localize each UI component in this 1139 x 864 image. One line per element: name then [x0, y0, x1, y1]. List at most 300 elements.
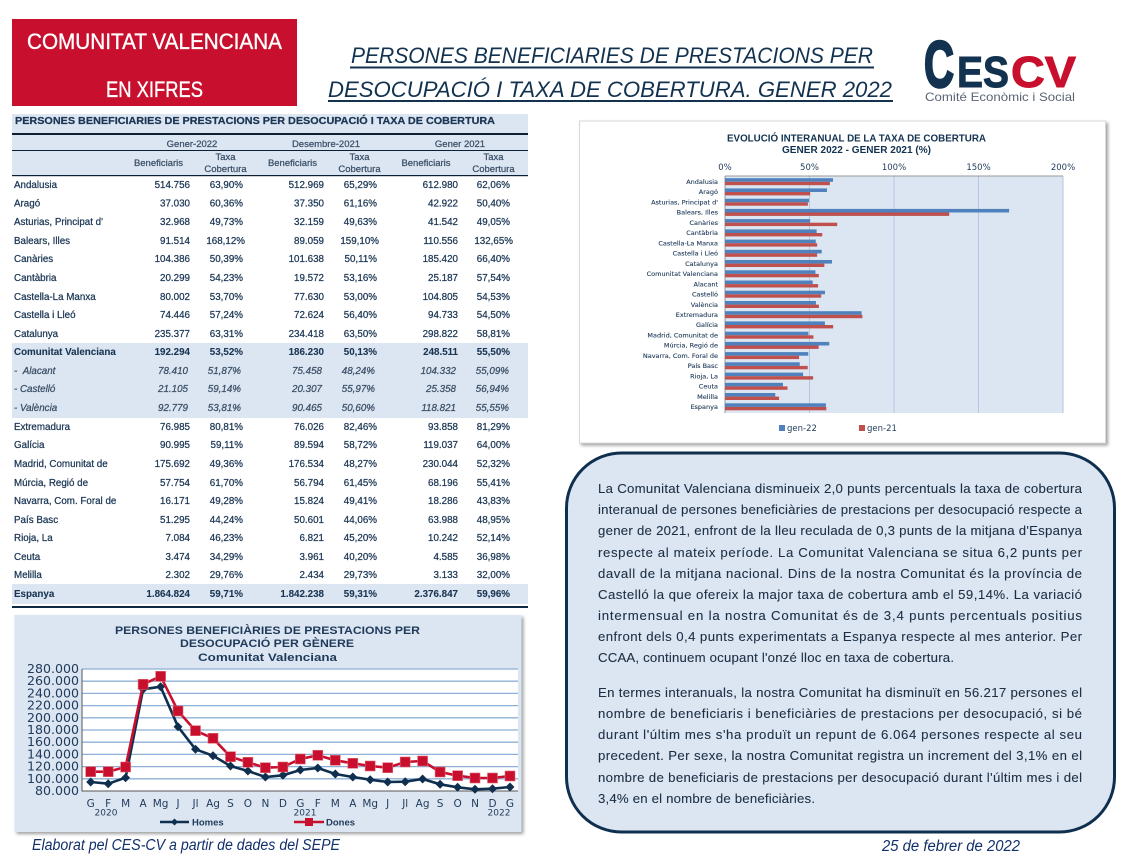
bar chart title: EVOLUCIÓ INTERANUAL DE LA TAXA DE COBERTURA — [727, 132, 986, 144]
row: Madrid: 49,36% — [210, 459, 243, 470]
bars: Andalusia — [686, 178, 833, 186]
main title: DESOCUPACIÓ I TAXA DE COBERTURA. GENER 2022 — [328, 77, 892, 102]
row: Castella i Lleó: 57,24% — [210, 310, 243, 321]
row: Rioja: 7.084 — [165, 533, 191, 544]
table header: Cobertura — [204, 164, 247, 175]
bars: Navarra: Navarra, Com. Foral de — [643, 352, 718, 360]
bars: Madrid — [647, 332, 813, 340]
row: Castella i Lleó — [14, 310, 510, 321]
paragraph 2: precedent. Per sexe, la nostra Comunitat registra un increment del 3,1% en el — [598, 748, 1082, 763]
row: Castelló — [14, 384, 509, 395]
logo: CES-CV: ES — [957, 48, 1009, 97]
row: València: 118.821 — [421, 403, 456, 414]
row: Rioja: Rioja, La — [14, 533, 53, 544]
bar chart axis labels — [718, 163, 1075, 173]
bars: Andalusia: Andalusia — [686, 178, 718, 186]
row: Galícia: 90.995 — [160, 440, 191, 451]
banner: Comunitat Valenciana en xifres — [12, 19, 297, 106]
row: Canàries: 185.420 — [423, 254, 459, 265]
row: Ceuta: 3.474 — [165, 552, 191, 563]
row: Canàries — [14, 254, 510, 265]
bars: Aragó — [699, 188, 827, 196]
x axis labels: G — [296, 798, 304, 810]
row: Galícia — [14, 440, 510, 451]
bars: Castella-La Manxa — [658, 239, 817, 247]
row: Galícia: Galícia — [14, 440, 45, 451]
row: Comunitat Valenciana: 53,52% — [210, 347, 243, 358]
row: Extremadura: 82,46% — [344, 422, 377, 433]
row: Cantàbria — [14, 273, 510, 284]
bar chart title — [727, 132, 986, 156]
row: Comunitat Valenciana: 186.230 — [289, 347, 325, 358]
row: Espanya: 1.864.824 — [146, 589, 191, 600]
bars: València: València — [691, 301, 718, 309]
row: Canàries: 50,39% — [210, 254, 243, 265]
row: Andalusia: 514.756 — [155, 180, 191, 191]
row: Cantàbria: 57,54% — [477, 273, 510, 284]
row: Melilla: 32,00% — [477, 570, 510, 581]
paragraph 1: respecte al mateix període. La Comunitat Valenciana se situa 6,2 punts per — [598, 545, 1083, 560]
x axis labels: J — [175, 798, 180, 810]
row: Balears: 89.059 — [294, 236, 324, 247]
row: Asturias: 32.159 — [294, 217, 324, 228]
row: Andalusia: Andalusia — [14, 180, 58, 191]
x axis labels: N — [261, 798, 269, 810]
row: Andalusia — [14, 180, 510, 191]
row: País Basc: 44,24% — [210, 515, 243, 526]
x axis labels: Ag — [416, 798, 430, 810]
legend: Homes and Dones — [160, 818, 355, 828]
paragraph 1: davall de la mitjana nacional. Dins de la nostra Comunitat és la província de — [598, 566, 1082, 581]
bar chart axis labels: 200% — [1051, 163, 1075, 173]
row: Ceuta: Ceuta — [14, 552, 41, 563]
row: Castelló: 21.105 — [157, 384, 189, 395]
paragraph 1 — [598, 481, 1083, 665]
y axis labels: 280.000 — [27, 661, 79, 676]
bar chart axis labels: 150% — [966, 163, 991, 173]
row: Espanya: Espanya — [14, 589, 55, 600]
x axis labels: F — [315, 798, 321, 810]
line chart title — [115, 624, 420, 664]
bar chart legend — [779, 424, 897, 434]
bars: Canàries: Canàries — [690, 219, 719, 227]
row: Rioja: 46,23% — [210, 533, 243, 544]
bars: Aragó: Aragó — [699, 188, 718, 196]
table header: Taxa — [215, 152, 236, 163]
row: Rioja: 45,20% — [344, 533, 377, 544]
row: Catalunya: 234.418 — [289, 329, 325, 340]
bars: Galícia: Galícia — [696, 321, 718, 329]
row: Asturias: 32.968 — [160, 217, 191, 228]
row: Castella-La Manxa: 54,53% — [477, 292, 510, 303]
row: Melilla: 2.302 — [165, 570, 190, 581]
row: Madrid: 230.044 — [423, 459, 459, 470]
row: Madrid: 175.692 — [155, 459, 190, 470]
row: Navarra: 16.171 — [160, 496, 190, 507]
row: Ceuta: 4.585 — [433, 552, 459, 563]
row: Aragó: 37.030 — [160, 198, 191, 210]
bars: Balears: Balears, Illes — [677, 209, 719, 217]
bars: Rioja: Rioja, La — [690, 372, 718, 380]
row: Castella-La Manxa: 80.002 — [160, 292, 190, 303]
row: Balears: 91.514 — [160, 236, 191, 247]
row: Castelló: 55,97% — [342, 384, 375, 395]
row: València: 55,55% — [476, 403, 509, 414]
row: Melilla: 29,76% — [210, 570, 243, 581]
x axis labels: G — [506, 798, 514, 810]
row: Castella-La Manxa — [14, 292, 510, 303]
y axis labels: 160.000 — [27, 734, 79, 749]
row: Catalunya: 58,81% — [477, 329, 510, 340]
table header: Beneficiaris — [134, 158, 183, 169]
paragraph 2 — [598, 685, 1082, 806]
row: Canàries: 104.386 — [155, 254, 191, 265]
row: País Basc: País Basc — [14, 515, 58, 526]
row: Comunitat Valenciana: 248.511 — [423, 347, 459, 358]
y axis labels: 260.000 — [27, 673, 79, 688]
row: Cantàbria: 19.572 — [294, 273, 324, 284]
y axis labels: 180.000 — [27, 722, 79, 737]
row: Castelló: 56,94% — [476, 384, 509, 395]
table header — [12, 133, 528, 176]
row: Balears: 168,12% — [206, 236, 245, 247]
x axis labels: F — [105, 798, 111, 810]
row: Madrid: Madrid, Comunitat de — [14, 459, 108, 470]
row: Ceuta: 36,98% — [477, 552, 510, 563]
row: Asturias: 49,73% — [210, 217, 243, 228]
row: Castella-La Manxa: 104.805 — [423, 292, 459, 303]
row: Múrcia: 56.794 — [294, 478, 325, 489]
bars: Extremadura — [676, 311, 862, 319]
paragraph 1: La Comunitat Valenciana disminueix 2,0 punts percentuals la taxa de cobertura — [598, 481, 1083, 496]
row: Aragó: 50,40% — [477, 198, 510, 210]
bars: Madrid: Madrid, Comunitat de — [647, 332, 718, 340]
paragraph 2: 3,4% en el nombre de beneficiàries. — [598, 791, 815, 806]
x axis labels: Mg — [153, 798, 168, 810]
bars: València — [691, 301, 819, 309]
bar chart axis labels: 100% — [882, 163, 906, 173]
series: Dones — [91, 676, 510, 778]
row: Andalusia: 65,29% — [344, 180, 377, 191]
row: Navarra — [14, 496, 510, 507]
row: Castella-La Manxa: 77.630 — [294, 292, 325, 303]
y axis labels: 140.000 — [27, 746, 79, 761]
x axis labels: S — [227, 798, 234, 810]
y axis labels: 200.000 — [27, 710, 79, 725]
paragraph 2: nombre de beneficiaris de prestacions per desocupació durant l'últim mes i del — [598, 770, 1082, 785]
row: Múrcia: 55,41% — [477, 478, 510, 489]
x axis labels: N — [471, 798, 479, 810]
row: Alacant: 78.410 — [158, 366, 189, 377]
table header: Gener 2021 — [435, 139, 485, 150]
bars: Cantàbria: Cantàbria — [686, 229, 718, 237]
row: Balears: 132,65% — [474, 236, 513, 247]
bars: Espanya — [690, 403, 826, 411]
row: Espanya — [14, 589, 510, 600]
row: Madrid: 176.534 — [289, 459, 325, 470]
row: Cantàbria: 25.187 — [428, 273, 458, 284]
panel: commentary text — [566, 453, 1114, 832]
row: Canàries: 50,11% — [344, 254, 377, 265]
x axis labels: G — [87, 798, 95, 810]
row: Cantàbria: Cantàbria — [14, 273, 57, 284]
bars: Canàries — [690, 219, 837, 227]
row: Andalusia: 512.969 — [289, 180, 324, 191]
panel: bar chart of coverage rate — [580, 121, 1106, 443]
row: Catalunya: 63,31% — [210, 329, 243, 340]
y axis labels — [27, 661, 79, 798]
x axis labels: A — [349, 798, 357, 810]
bars: País Basc: País Basc — [688, 362, 718, 370]
row: Melilla: 3.133 — [433, 570, 459, 581]
x axis labels: 2021 — [294, 808, 316, 818]
row: Galícia: 89.594 — [294, 440, 325, 451]
paragraph 1: gener de 2021, enfront de la lleu reculada de 0,3 punts de la mitjana d'Espanya — [598, 523, 1083, 538]
row: País Basc: 48,95% — [477, 515, 510, 526]
bar chart legend: gen-21 — [867, 424, 897, 434]
row: Navarra: 49,28% — [210, 496, 243, 507]
row: Castelló: 20.307 — [291, 384, 323, 395]
row: València: 50,60% — [342, 403, 375, 414]
row: Alacant: 75.458 — [292, 366, 323, 377]
bars: Castelló: Castelló — [692, 290, 718, 298]
x axis labels: 2022 — [488, 808, 510, 818]
bars: Navarra — [643, 352, 808, 360]
x axis labels: O — [244, 798, 252, 810]
row: Castella i Lleó: 54,50% — [477, 310, 510, 321]
table header: Desembre-2021 — [292, 139, 360, 150]
row: València: - València — [14, 403, 58, 414]
row: Extremadura: 81,29% — [477, 422, 510, 433]
row: Múrcia: 68.196 — [428, 478, 459, 489]
row: Aragó: 61,16% — [344, 198, 377, 210]
row: Cantàbria: 20.299 — [160, 273, 190, 284]
row: Alacant: 104.332 — [421, 366, 457, 377]
date: 25 de febrer de 2022 — [881, 838, 1020, 855]
row: Andalusia: 62,06% — [477, 180, 510, 191]
legend: Homes and Dones: Homes — [192, 818, 224, 828]
row: Catalunya: Catalunya — [14, 329, 59, 340]
row: Castella i Lleó: 72.624 — [294, 310, 325, 321]
bars: Comunitat Valenciana — [647, 270, 819, 278]
source note: Elaborat pel CES-CV a partir de dades del SEPE — [32, 837, 341, 854]
row: Navarra: Navarra, Com. Foral de — [14, 496, 117, 507]
bars: Balears — [677, 209, 1009, 217]
row: Navarra: 18.286 — [428, 496, 459, 507]
bars: Catalunya: Catalunya — [685, 260, 718, 268]
paragraph 1: CCAA, continuem ocupant l'onzé lloc en taxa de cobertura. — [598, 650, 954, 665]
row: Navarra: 49,41% — [344, 496, 377, 507]
x axis labels: O — [453, 798, 462, 810]
bars: Asturias: Asturias, Principat d' — [651, 198, 718, 206]
bars: Comunitat Valenciana: Comunitat Valenciana — [647, 270, 718, 278]
paragraph 1: enfront dels 0,4 punts experimentats a Espanya respecte al mes anterior. Per — [598, 629, 1083, 644]
paragraph 2: durant l'últim mes s'ha produït un repunt de 6.064 persones respecte al seu — [598, 727, 1082, 742]
bars: Castella i Lleó: Castella i Lleó — [673, 250, 718, 258]
row: Catalunya: 63,50% — [344, 329, 377, 340]
row: Aragó: 37.350 — [294, 198, 325, 210]
row: Asturias — [14, 217, 510, 228]
row: Melilla: 2.434 — [299, 570, 325, 581]
series: Homes — [91, 687, 510, 789]
logo: CES-CV — [924, 27, 1077, 104]
row: País Basc — [14, 515, 510, 526]
row: Galícia: 58,72% — [344, 440, 377, 451]
row: Múrcia: 61,70% — [210, 478, 243, 489]
row: Extremadura: 76.026 — [294, 422, 325, 433]
bars: Alacant: Alacant — [694, 280, 718, 288]
y axis labels: 240.000 — [27, 685, 79, 700]
bars: Castella i Lleó — [673, 250, 822, 258]
row: Castella-La Manxa: Castella-La Manxa — [14, 292, 96, 303]
row: Andalusia: 612.980 — [423, 180, 459, 191]
banner: Comunitat Valenciana en xifres: EN XIFRES — [106, 77, 203, 102]
row: Madrid: 48,27% — [344, 459, 377, 470]
paragraph 1: interanual de persones beneficiàries de prestacions per desocupació respecte a — [598, 502, 1083, 517]
row: Navarra: 43,83% — [477, 496, 510, 507]
row: Rioja: 10.242 — [428, 533, 458, 544]
bars: Melilla — [697, 393, 779, 401]
main title — [328, 43, 893, 102]
row: Catalunya: 298.822 — [423, 329, 458, 340]
row: Aragó: 42.922 — [428, 198, 458, 210]
x axis labels: Ag — [206, 798, 220, 810]
row: València: 53,81% — [208, 403, 241, 414]
x axis labels: D — [279, 798, 287, 810]
x axis labels: D — [488, 798, 497, 810]
bar chart legend: gen-22 — [787, 424, 817, 434]
row: Melilla — [14, 570, 510, 581]
bar chart axis labels: 50% — [800, 163, 819, 173]
row: Balears: Balears, Illes — [14, 236, 70, 247]
bars: Castelló — [692, 290, 825, 298]
row: Comunitat Valenciana: 192.294 — [155, 347, 191, 358]
row: Rioja: 6.821 — [299, 533, 324, 544]
row: País Basc: 44,06% — [344, 515, 377, 526]
line chart title: DESOCUPACIÓ PER GÈNERE — [180, 637, 354, 650]
row: Asturias: Asturias, Principat d' — [14, 217, 103, 228]
row: Balears — [14, 236, 513, 247]
row: Alacant — [14, 366, 509, 377]
row: Catalunya — [14, 329, 510, 340]
row: Castella i Lleó: 56,40% — [344, 310, 377, 321]
table title — [12, 114, 528, 133]
row: País Basc: 50.601 — [294, 515, 324, 526]
row: Asturias: 49,63% — [344, 217, 377, 228]
table header: Taxa — [483, 152, 504, 163]
row: Melilla: 29,73% — [344, 570, 377, 581]
bars: Castella-La Manxa: Castella-La Manxa — [658, 239, 718, 247]
row: Galícia: 119.037 — [423, 440, 458, 451]
row: Ceuta: 3.961 — [299, 552, 324, 563]
paragraph 2: En termes interanuals, la nostra Comunitat ha disminuït en 56.217 persones el — [598, 685, 1082, 700]
row: Canàries: Canàries — [14, 254, 53, 265]
bar chart axis labels: 0% — [718, 163, 732, 173]
panel: line chart by gender — [14, 615, 522, 832]
bars: País Basc — [688, 362, 808, 370]
table title: PERSONES BENEFICIARIES DE PRESTACIONS PER DESOCUPACIÓ I TAXA DE COBERTURA — [15, 114, 495, 127]
row: Extremadura — [14, 422, 510, 433]
bars: Espanya: Espanya — [690, 403, 718, 411]
row: Múrcia — [14, 478, 510, 489]
x axis labels: J — [385, 798, 389, 810]
table header: Cobertura — [338, 164, 381, 175]
row: València: 92.779 — [158, 403, 189, 414]
row: Rioja: 52,14% — [477, 533, 510, 544]
banner: Comunitat Valenciana en xifres: COMUNITAT VALENCIANA — [27, 29, 282, 54]
highlight bands — [12, 343, 528, 608]
row: Aragó: 60,36% — [210, 198, 243, 210]
row: Alacant: - Alacant — [14, 366, 57, 377]
x axis labels: Jl — [191, 798, 199, 810]
bars: Alacant — [694, 280, 818, 288]
x axis labels: M — [331, 798, 340, 810]
row: Asturias: 49,05% — [477, 217, 510, 228]
row: Alacant: 55,09% — [476, 366, 509, 377]
paragraph 1: intermensual en la nostra Comunitat és de 3,4 punts percentuals positius — [598, 608, 1082, 623]
row: Múrcia: Múrcia, Regió de — [14, 478, 89, 489]
panel: data table — [12, 114, 528, 608]
row: Comunitat Valenciana — [14, 347, 510, 358]
row: Navarra: 15.824 — [294, 496, 325, 507]
bars: Melilla: Melilla — [697, 393, 718, 401]
table header: Gener-2022 — [167, 139, 217, 150]
row: Alacant: 51,87% — [208, 366, 241, 377]
row: Castella i Lleó: Castella i Lleó — [14, 310, 76, 321]
row: Extremadura: 76.985 — [160, 422, 191, 433]
table header: Beneficiaris — [268, 158, 317, 169]
bar chart title: GENER 2022 - GENER 2021 (%) — [782, 145, 931, 156]
bars: Catalunya — [685, 260, 832, 268]
bars: Galícia — [696, 321, 833, 329]
bars: Múrcia: Múrcia, Regió de — [664, 342, 718, 350]
row: Aragó — [14, 198, 510, 210]
row: València: 90.465 — [292, 403, 323, 414]
legend: Homes and Dones: Dones — [326, 818, 355, 828]
x axis labels: 2020 — [95, 808, 118, 818]
row: Extremadura: Extremadura — [14, 422, 71, 433]
row: Catalunya: 235.377 — [155, 329, 190, 340]
logo: CES-CV: Comité Econòmic i Social — [925, 90, 1075, 104]
row: Comunitat Valenciana: 50,13% — [344, 347, 377, 358]
row: Madrid: 52,32% — [477, 459, 510, 470]
y axis labels: 220.000 — [27, 698, 79, 713]
bars: Rioja — [690, 372, 813, 380]
x axis labels: M — [121, 798, 130, 810]
row: Extremadura: 93.858 — [428, 422, 459, 433]
row: País Basc: 51.295 — [160, 515, 191, 526]
bars: Asturias — [651, 198, 809, 206]
bars: Cantàbria — [686, 229, 822, 237]
row: Alacant: 48,24% — [342, 366, 375, 377]
row: Castella i Lleó: 94.733 — [428, 310, 459, 321]
row: Galícia: 59,11% — [210, 440, 243, 451]
row: Balears: 110.556 — [423, 236, 459, 247]
line chart title: Comunitat Valenciana — [198, 652, 338, 664]
row: Castelló: 59,14% — [208, 384, 241, 395]
bars: Múrcia — [664, 342, 829, 350]
row: Comunitat Valenciana: 55,50% — [477, 347, 510, 358]
row: Castelló: - Castelló — [14, 384, 56, 395]
x axis labels: S — [437, 798, 444, 810]
y axis labels: 100.000 — [27, 771, 79, 786]
x axis labels: Mg — [362, 798, 378, 810]
row: Ceuta — [14, 552, 510, 563]
row: Castelló: 25.358 — [425, 384, 457, 395]
row: València — [14, 403, 509, 414]
row: Madrid — [14, 459, 510, 470]
row: Ceuta: 34,29% — [210, 552, 243, 563]
